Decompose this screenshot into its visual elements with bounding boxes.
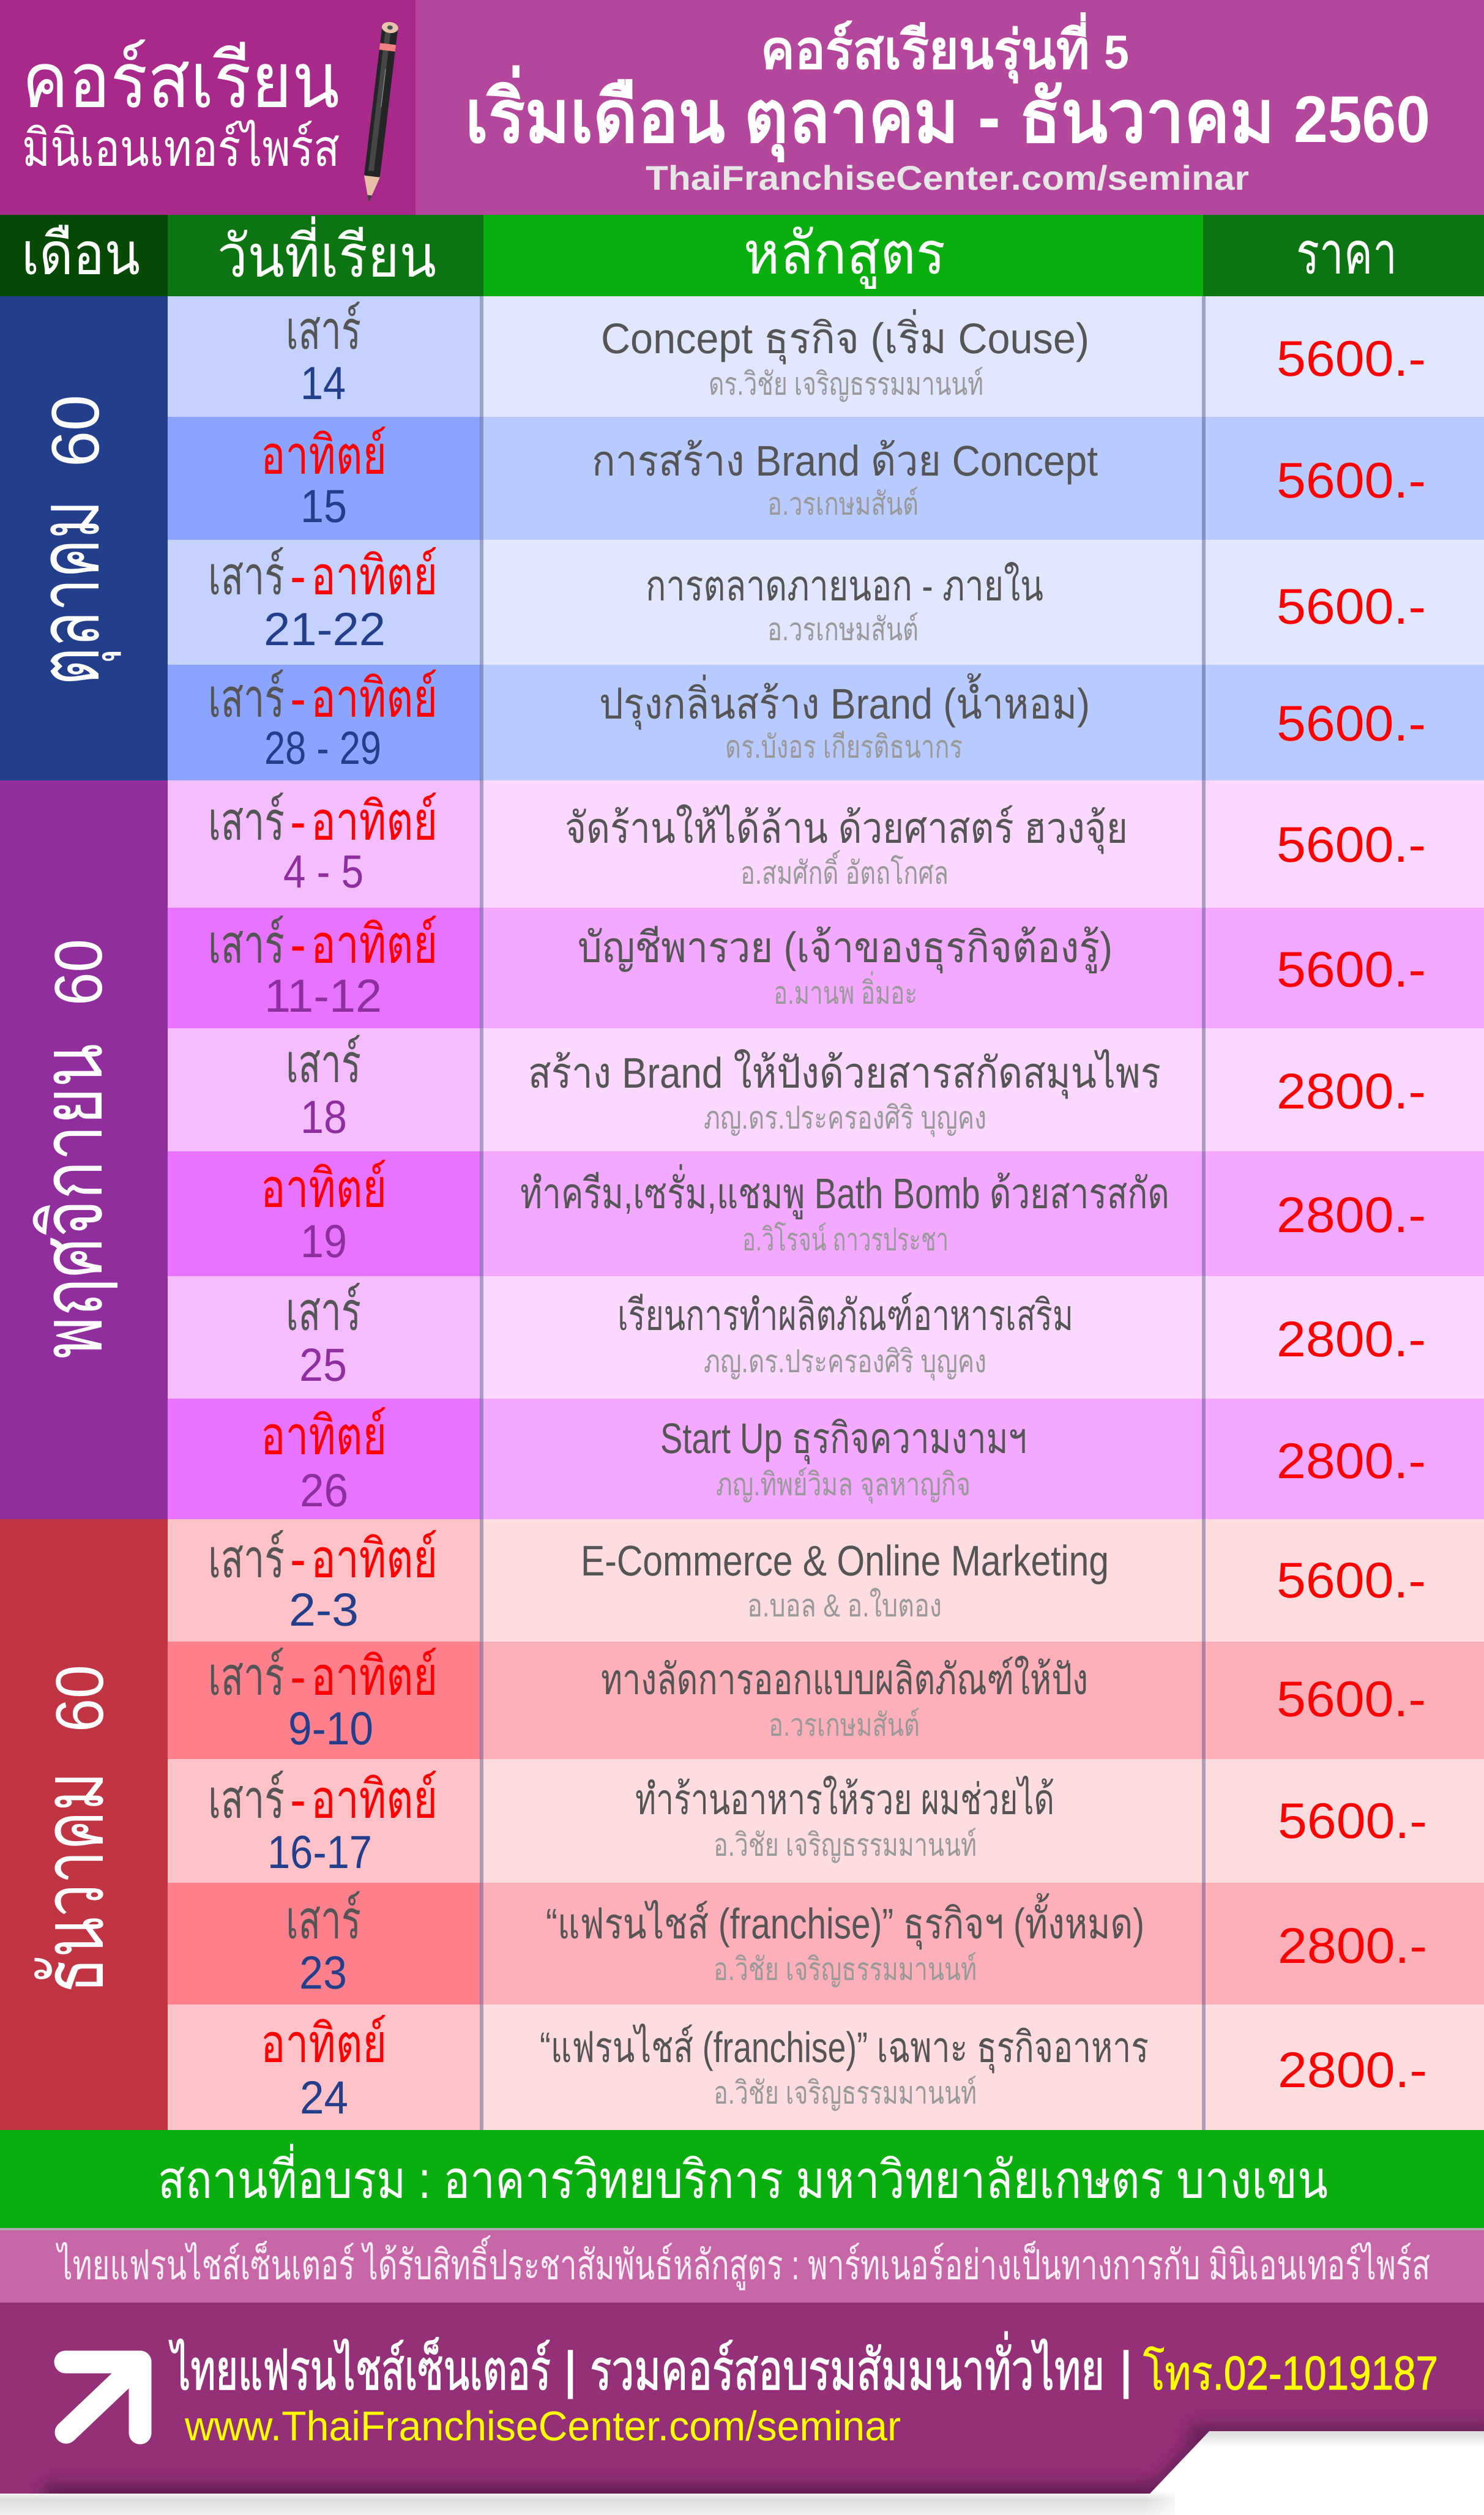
row: 28-29 October: - [290, 668, 306, 728]
row: 9-10 December: อ.วรเกษมสันต์ [769, 1708, 920, 1743]
row: 4-5 November [168, 780, 1484, 908]
row: 26 November: 2800.- [1277, 1433, 1426, 1489]
row: 25 November: ภญ.ดร.ประครองศิริ บุญคง [704, 1344, 986, 1381]
row: 16-17 December: อาทิตย์ [311, 1769, 438, 1829]
footer headline [168, 2331, 1133, 2402]
column heading: course: หลักสูตร [744, 221, 945, 290]
row: 24 December: 2800.- [1278, 2042, 1427, 2098]
row: 16-17 December: ทำร้านอาหารให้รวย ผมช่วยได้ [635, 1776, 1054, 1823]
row: 21-22 October: การตลาดภายนอก - ภายใน [646, 562, 1043, 610]
row: 26 November: ภญ.ทิพย์วิมล จุลหาญกิจ [716, 1467, 971, 1504]
row: 4-5 November: - [290, 791, 306, 851]
row: 28-29 October: 5600.- [1277, 696, 1426, 752]
row: 14 October: 5600.- [1277, 331, 1426, 387]
row: 9-10 December: 9-10 [288, 1703, 373, 1755]
row: 18 November: ภญ.ดร.ประครองศิริ บุญคง [704, 1101, 986, 1137]
row: 26 November: 26 [300, 1465, 348, 1517]
row: 4-5 November: 5600.- [1277, 817, 1426, 873]
row: 11-12 November: บัญชีพารวย (เจ้าของธุรกิจต้องรู้) [578, 924, 1113, 974]
row: 15 October: 15 [300, 480, 347, 533]
row: 21-22 October: เสาร์ [208, 545, 285, 606]
brand title: คอร์สเรียน [22, 37, 340, 124]
row: 25 November: เรียนการทำผลิตภัณฑ์อาหารเสริม [617, 1291, 1073, 1339]
row: 2-3 December: 5600.- [1277, 1553, 1426, 1609]
brand subtitle: มินิเอนเทอร์ไพร์ส [22, 119, 340, 177]
row: 19 November: ทำครีม,เซรั่ม,แชมพู Bath Bomb ด้วยสารสกัด [520, 1164, 1169, 1220]
row: 19 November [168, 1151, 1484, 1276]
row: 9-10 December: เสาร์ [208, 1646, 285, 1706]
website: ThaiFranchiseCenter.com/seminar [646, 159, 1249, 197]
row: 19 November: 19 [300, 1216, 347, 1268]
round title: คอร์สเรียนรุ่นที่ 5 [761, 12, 1129, 84]
row: 18 November: 2800.- [1277, 1064, 1426, 1119]
row: 16-17 December: 5600.- [1278, 1793, 1427, 1849]
month panel: October: ตุลาคม [21, 500, 121, 686]
row: 9-10 December: อาทิตย์ [311, 1646, 438, 1706]
row: 9-10 December: 5600.- [1277, 1672, 1426, 1727]
row: 23 December: เสาร์ [286, 1889, 361, 1950]
partner notice band [0, 2230, 1484, 2303]
table header row [0, 215, 1484, 296]
header: course brand panel [0, 0, 416, 215]
row: 23 December: “แฟรนไชส์ (franchise)” ธุรกิจฯ (ทั้งหมด) [546, 1893, 1144, 1950]
row: 2-3 December: เสาร์ [208, 1528, 285, 1589]
row: 15 October [168, 417, 1484, 540]
row: 11-12 November: เสาร์ [208, 914, 285, 974]
row: 28-29 October: เสาร์ [208, 668, 285, 728]
row: 26 November: อาทิตย์ [261, 1405, 387, 1466]
row: 23 December [168, 1883, 1484, 2005]
row: 25 November: 2800.- [1277, 1312, 1426, 1367]
row: 16-17 December: 16-17 [267, 1826, 372, 1878]
row: 25 November: 25 [299, 1339, 347, 1391]
row: 15 October: อ.วรเกษมสันต์ [767, 487, 919, 522]
row: 14 October [168, 296, 1484, 417]
date range: เริ่มเดือน ตุลาคม - ธันวาคม 2560 [465, 65, 1430, 163]
row: 23 December: 2800.- [1278, 1918, 1427, 1974]
row: 24 December: 24 [300, 2072, 348, 2124]
row: 9-10 December: - [290, 1646, 306, 1706]
row: 19 November: 2800.- [1277, 1187, 1426, 1243]
row: 28-29 October [168, 665, 1484, 780]
row: 11-12 November: อาทิตย์ [311, 914, 438, 974]
row: 4-5 November: จัดร้านให้ได้ล้าน ด้วยศาสตร์ ฮวงจุ้ย [565, 804, 1128, 854]
row: 2-3 December: อาทิตย์ [311, 1528, 438, 1589]
column heading: price: ราคา [1296, 221, 1397, 286]
row: 26 November: Start Up ธุรกิจความงามฯ [660, 1414, 1027, 1465]
row: 11-12 November: 5600.- [1277, 942, 1426, 998]
column heading: date: วันที่เรียน [217, 216, 436, 290]
footer panel [0, 2303, 1484, 2505]
row: 18 November: 18 [300, 1091, 347, 1143]
icon: arrow [65, 2362, 140, 2433]
row: 16-17 December: เสาร์ [208, 1769, 285, 1829]
row: 18 November [168, 1028, 1484, 1151]
row: 4-5 November: 4 - 5 [283, 846, 364, 898]
month panel: December: 60 [42, 1665, 117, 1732]
row: 2-3 December: E-Commerce & Online Marketing [581, 1537, 1109, 1585]
row: 4-5 November: เสาร์ [208, 791, 285, 851]
row: 2-3 December: - [290, 1528, 306, 1589]
phone number: โทร.02-1019187 [1143, 2346, 1438, 2400]
month panel: November: พฤศจิกายน [24, 1044, 120, 1359]
month panel: November: 60 [41, 939, 116, 1006]
row: 21-22 October: 21-22 [264, 604, 386, 656]
row: 15 October: 5600.- [1277, 453, 1426, 509]
row: 25 November [168, 1276, 1484, 1399]
row: 21-22 October: อาทิตย์ [311, 545, 438, 606]
row: 14 October: 14 [300, 357, 346, 409]
row: 15 October: การสร้าง Brand ด้วย Concept [592, 437, 1098, 485]
icon: pencil [360, 21, 399, 204]
row: 19 November: อ.วิโรจน์ ถาวรประชา [742, 1222, 949, 1258]
month panel: October [0, 296, 168, 780]
row: 9-10 December: ทางลัดการออกแบบผลิตภัณฑ์ให้ปัง [601, 1656, 1088, 1703]
row: 21-22 October [168, 540, 1484, 665]
month panel: November [0, 780, 168, 1519]
month panel: October: 60 [38, 395, 113, 467]
row: 28-29 October: อาทิตย์ [311, 668, 438, 728]
row: 28-29 October: ปรุงกลิ่นสร้าง Brand (น้ำหอม) [599, 673, 1090, 730]
row: 26 November [168, 1399, 1484, 1519]
row: 9-10 December [168, 1642, 1484, 1759]
row: 18 November: เสาร์ [286, 1033, 361, 1094]
row: 25 November: เสาร์ [286, 1281, 361, 1342]
row: 4-5 November: อาทิตย์ [311, 791, 438, 851]
row: 24 December: อ.วิชัย เจริญธรรมมานนท์ [714, 2076, 977, 2111]
row: 14 October: เสาร์ [286, 300, 361, 361]
row: 23 December: 23 [299, 1947, 347, 1999]
row: 21-22 October: 5600.- [1277, 579, 1426, 635]
row: 11-12 November [168, 908, 1484, 1028]
row: 4-5 November: อ.สมศักดิ์ อัตถโกศล [740, 850, 949, 891]
row: 23 December: อ.วิชัย เจริญธรรมมานนท์ [714, 1952, 977, 1987]
row: 15 October: อาทิตย์ [261, 425, 387, 485]
footer headline: | [1119, 2341, 1133, 2399]
row: 14 October: Concept ธุรกิจ (เริ่ม Couse) [601, 309, 1089, 365]
row: 21-22 October: - [290, 545, 306, 606]
header: course round and dates panel [416, 0, 1484, 215]
row: 2-3 December: 2-3 [289, 1584, 359, 1636]
month panel: December [0, 1519, 168, 2130]
row: 14 October: ดร.วิชัย เจริญธรรมมานนท์ [709, 367, 983, 402]
row: 11-12 November: อ.มานพ อิ่มอะ [774, 971, 917, 1011]
venue band [0, 2130, 1484, 2230]
column heading: month: เดือน [21, 222, 140, 287]
footer website: www.ThaiFranchiseCenter.com/seminar [184, 2403, 901, 2450]
row: 2-3 December: อ.บอล & อ.ใบตอง [747, 1588, 942, 1624]
row: 28-29 October: 28 - 29 [264, 722, 381, 774]
row: 19 November: อาทิตย์ [261, 1158, 387, 1219]
row: 24 December: “แฟรนไชส์ (franchise)” เฉพาะ ธุรกิจอาหาร [540, 2024, 1149, 2074]
row: 21-22 October: อ.วรเกษมสันต์ [767, 612, 919, 648]
row: 16-17 December [168, 1759, 1484, 1883]
footer headline: รวมคอร์สอบรมสัมมนาทั่วไทย [590, 2331, 1105, 2402]
row: 24 December [168, 2005, 1484, 2130]
row: 11-12 November: 11-12 [264, 970, 382, 1022]
row: 16-17 December: - [290, 1769, 306, 1829]
footer headline: ไทยแฟรนไชส์เซ็นเตอร์ [168, 2337, 551, 2402]
row: 2-3 December [168, 1519, 1484, 1642]
row: 16-17 December: อ.วิชัย เจริญธรรมมานนท์ [714, 1828, 977, 1863]
row: 28-29 October: ดร.บังอร เกียรติธนากร [725, 730, 963, 765]
row: 18 November: สร้าง Brand ให้ปังด้วยสารสกัดสมุนไพร [528, 1049, 1161, 1099]
footer headline: | [564, 2341, 577, 2399]
month panel: December: ธันวาคม [25, 1772, 121, 1994]
row: 11-12 November: - [290, 914, 306, 974]
row: 24 December: อาทิตย์ [261, 2013, 387, 2074]
